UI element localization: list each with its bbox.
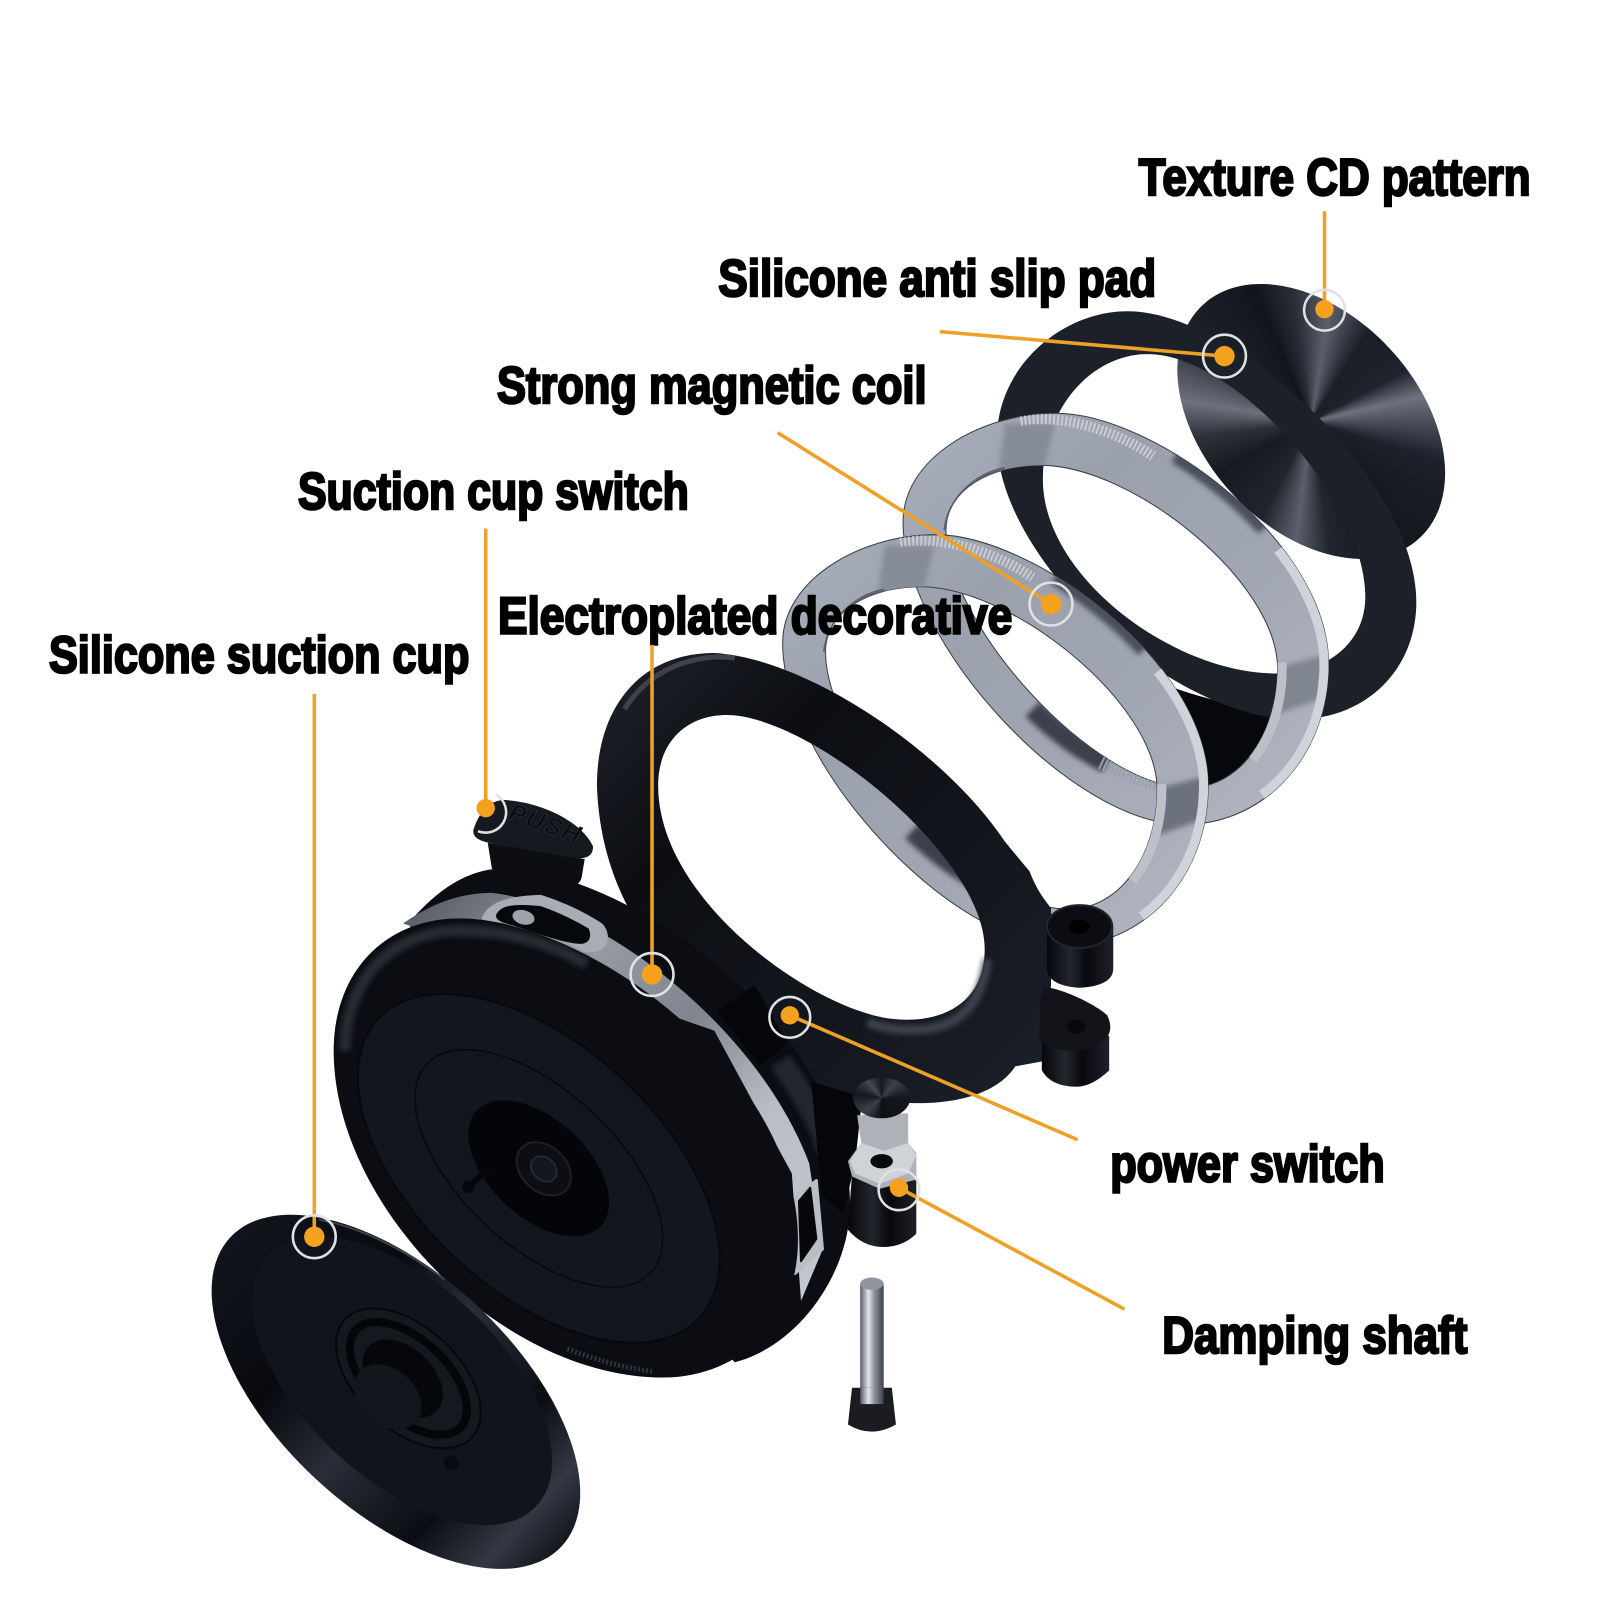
callout: Texture CD pattern: Texture CD pattern [1139, 149, 1531, 207]
icon: hinged clasp ring [597, 653, 1113, 1103]
callout: Damping shaft [879, 1169, 1467, 1365]
icon: main suction body [295, 868, 850, 1408]
icon: lower hinge lug [1040, 987, 1110, 1087]
icon: upper hinge lug [1047, 905, 1113, 988]
callout: Silicone suction cup [49, 626, 469, 1258]
callout: Strong magnetic coil [497, 357, 1072, 626]
callout: Electroplated decorative: Electroplated decorative [498, 588, 1012, 646]
icon: electroplated decorative ring [783, 535, 1212, 946]
icon: charging port [788, 1181, 822, 1273]
icon: power switch block [719, 988, 785, 1063]
callout: Suction cup switch [298, 463, 689, 840]
callout: power switch: power switch [1110, 1136, 1385, 1194]
callout: power switch [769, 997, 1385, 1194]
callout: Silicone suction cup: Silicone suction cup [49, 626, 469, 684]
icon: strong magnetic coil ring [903, 413, 1333, 824]
icon: silicone anti slip pad ring [997, 311, 1416, 796]
icon: indicator slot [482, 895, 608, 952]
central recess [443, 1075, 634, 1262]
icon: damping hinge assembly [811, 1078, 916, 1247]
callout: Silicone anti slip pad [718, 250, 1246, 378]
front face [334, 918, 798, 1378]
icon: texture CD pattern disc [1124, 232, 1498, 611]
callout: Texture CD pattern [1139, 149, 1531, 331]
callout: Damping shaft: Damping shaft [1162, 1307, 1467, 1365]
callout: Silicone anti slip pad: Silicone anti slip pad [718, 250, 1156, 308]
icon: damping shaft pin [848, 1278, 896, 1432]
body back shell [408, 868, 850, 1362]
callout: Electroplated decorative [498, 588, 1012, 996]
silver band [403, 893, 822, 1301]
icon: suction cup switch push button: PUSH [505, 799, 586, 850]
callout: Strong magnetic coil: Strong magnetic coil [497, 357, 927, 415]
callout: Suction cup switch: Suction cup switch [298, 463, 689, 521]
icon: silicone suction cup [150, 1151, 642, 1600]
icon: suction cup switch push button [473, 799, 593, 887]
